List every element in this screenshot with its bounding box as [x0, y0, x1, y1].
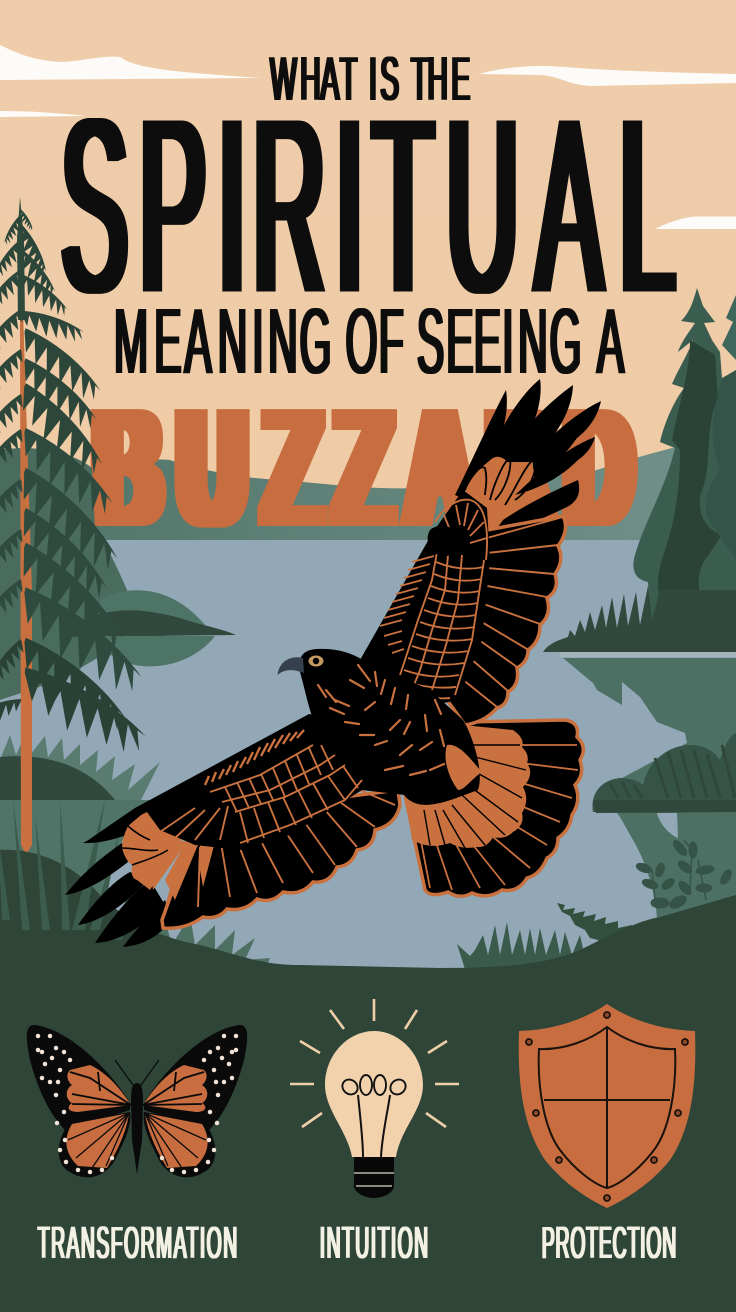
lower wing feather separators [163, 788, 395, 917]
right grass [457, 922, 610, 985]
label: PROTECTION: PROTECTION [542, 1219, 676, 1268]
foreground ground [0, 850, 736, 1312]
island [60, 590, 236, 666]
left hump with grass [0, 728, 160, 900]
right pine trees [633, 288, 736, 620]
filament [358, 1095, 390, 1157]
fern [557, 903, 640, 960]
grass under wing [150, 915, 270, 980]
body streaks [318, 665, 444, 775]
word: BUZZARD: BUZZARD [94, 374, 632, 561]
title line: SPIRITUAL: SPIRITUAL [61, 68, 675, 345]
left pine tree [0, 197, 156, 754]
icon: light bulb [290, 999, 459, 1198]
body [299, 649, 480, 805]
small plants [635, 839, 733, 914]
label: INTUITION: INTUITION [320, 1219, 428, 1268]
lake water [0, 540, 736, 980]
right bushes [592, 733, 736, 813]
upper wing orange hand [450, 450, 550, 545]
left grass blades [0, 800, 140, 940]
rump patch [445, 745, 482, 790]
sky background [0, 0, 736, 545]
title line: MEANING OF SEEING A: MEANING OF SEEING A [114, 290, 624, 394]
upper wing secondary feathers [440, 516, 566, 725]
icon: butterfly [27, 1025, 247, 1177]
lower wing streaks [205, 730, 304, 785]
right shore reflection [563, 658, 736, 930]
lower wing secondary feathers [162, 790, 400, 928]
lower wing orange hand [122, 810, 215, 900]
left shore mass [0, 448, 128, 700]
rivets [526, 1012, 688, 1201]
title line: WHAT IS THE: WHAT IS THE [270, 45, 470, 114]
upper wing coverts [360, 490, 490, 712]
upper wing primaries [455, 379, 601, 538]
right shore with grass [543, 586, 736, 652]
clouds [0, 45, 736, 229]
upper wing feather separators [457, 517, 563, 707]
tree trunk [20, 310, 32, 855]
lower wing coverts [84, 714, 405, 850]
upper wing streaks [380, 556, 434, 653]
label: TRANSFORMATION: TRANSFORMATION [38, 1219, 237, 1268]
lower wing primaries [65, 810, 172, 947]
bulb base [354, 1157, 394, 1198]
distant hill [80, 446, 680, 545]
head and beak [278, 656, 324, 675]
icon: shield [519, 1004, 695, 1208]
rays [290, 999, 459, 1127]
tail [405, 720, 583, 896]
buzzard [65, 379, 601, 947]
